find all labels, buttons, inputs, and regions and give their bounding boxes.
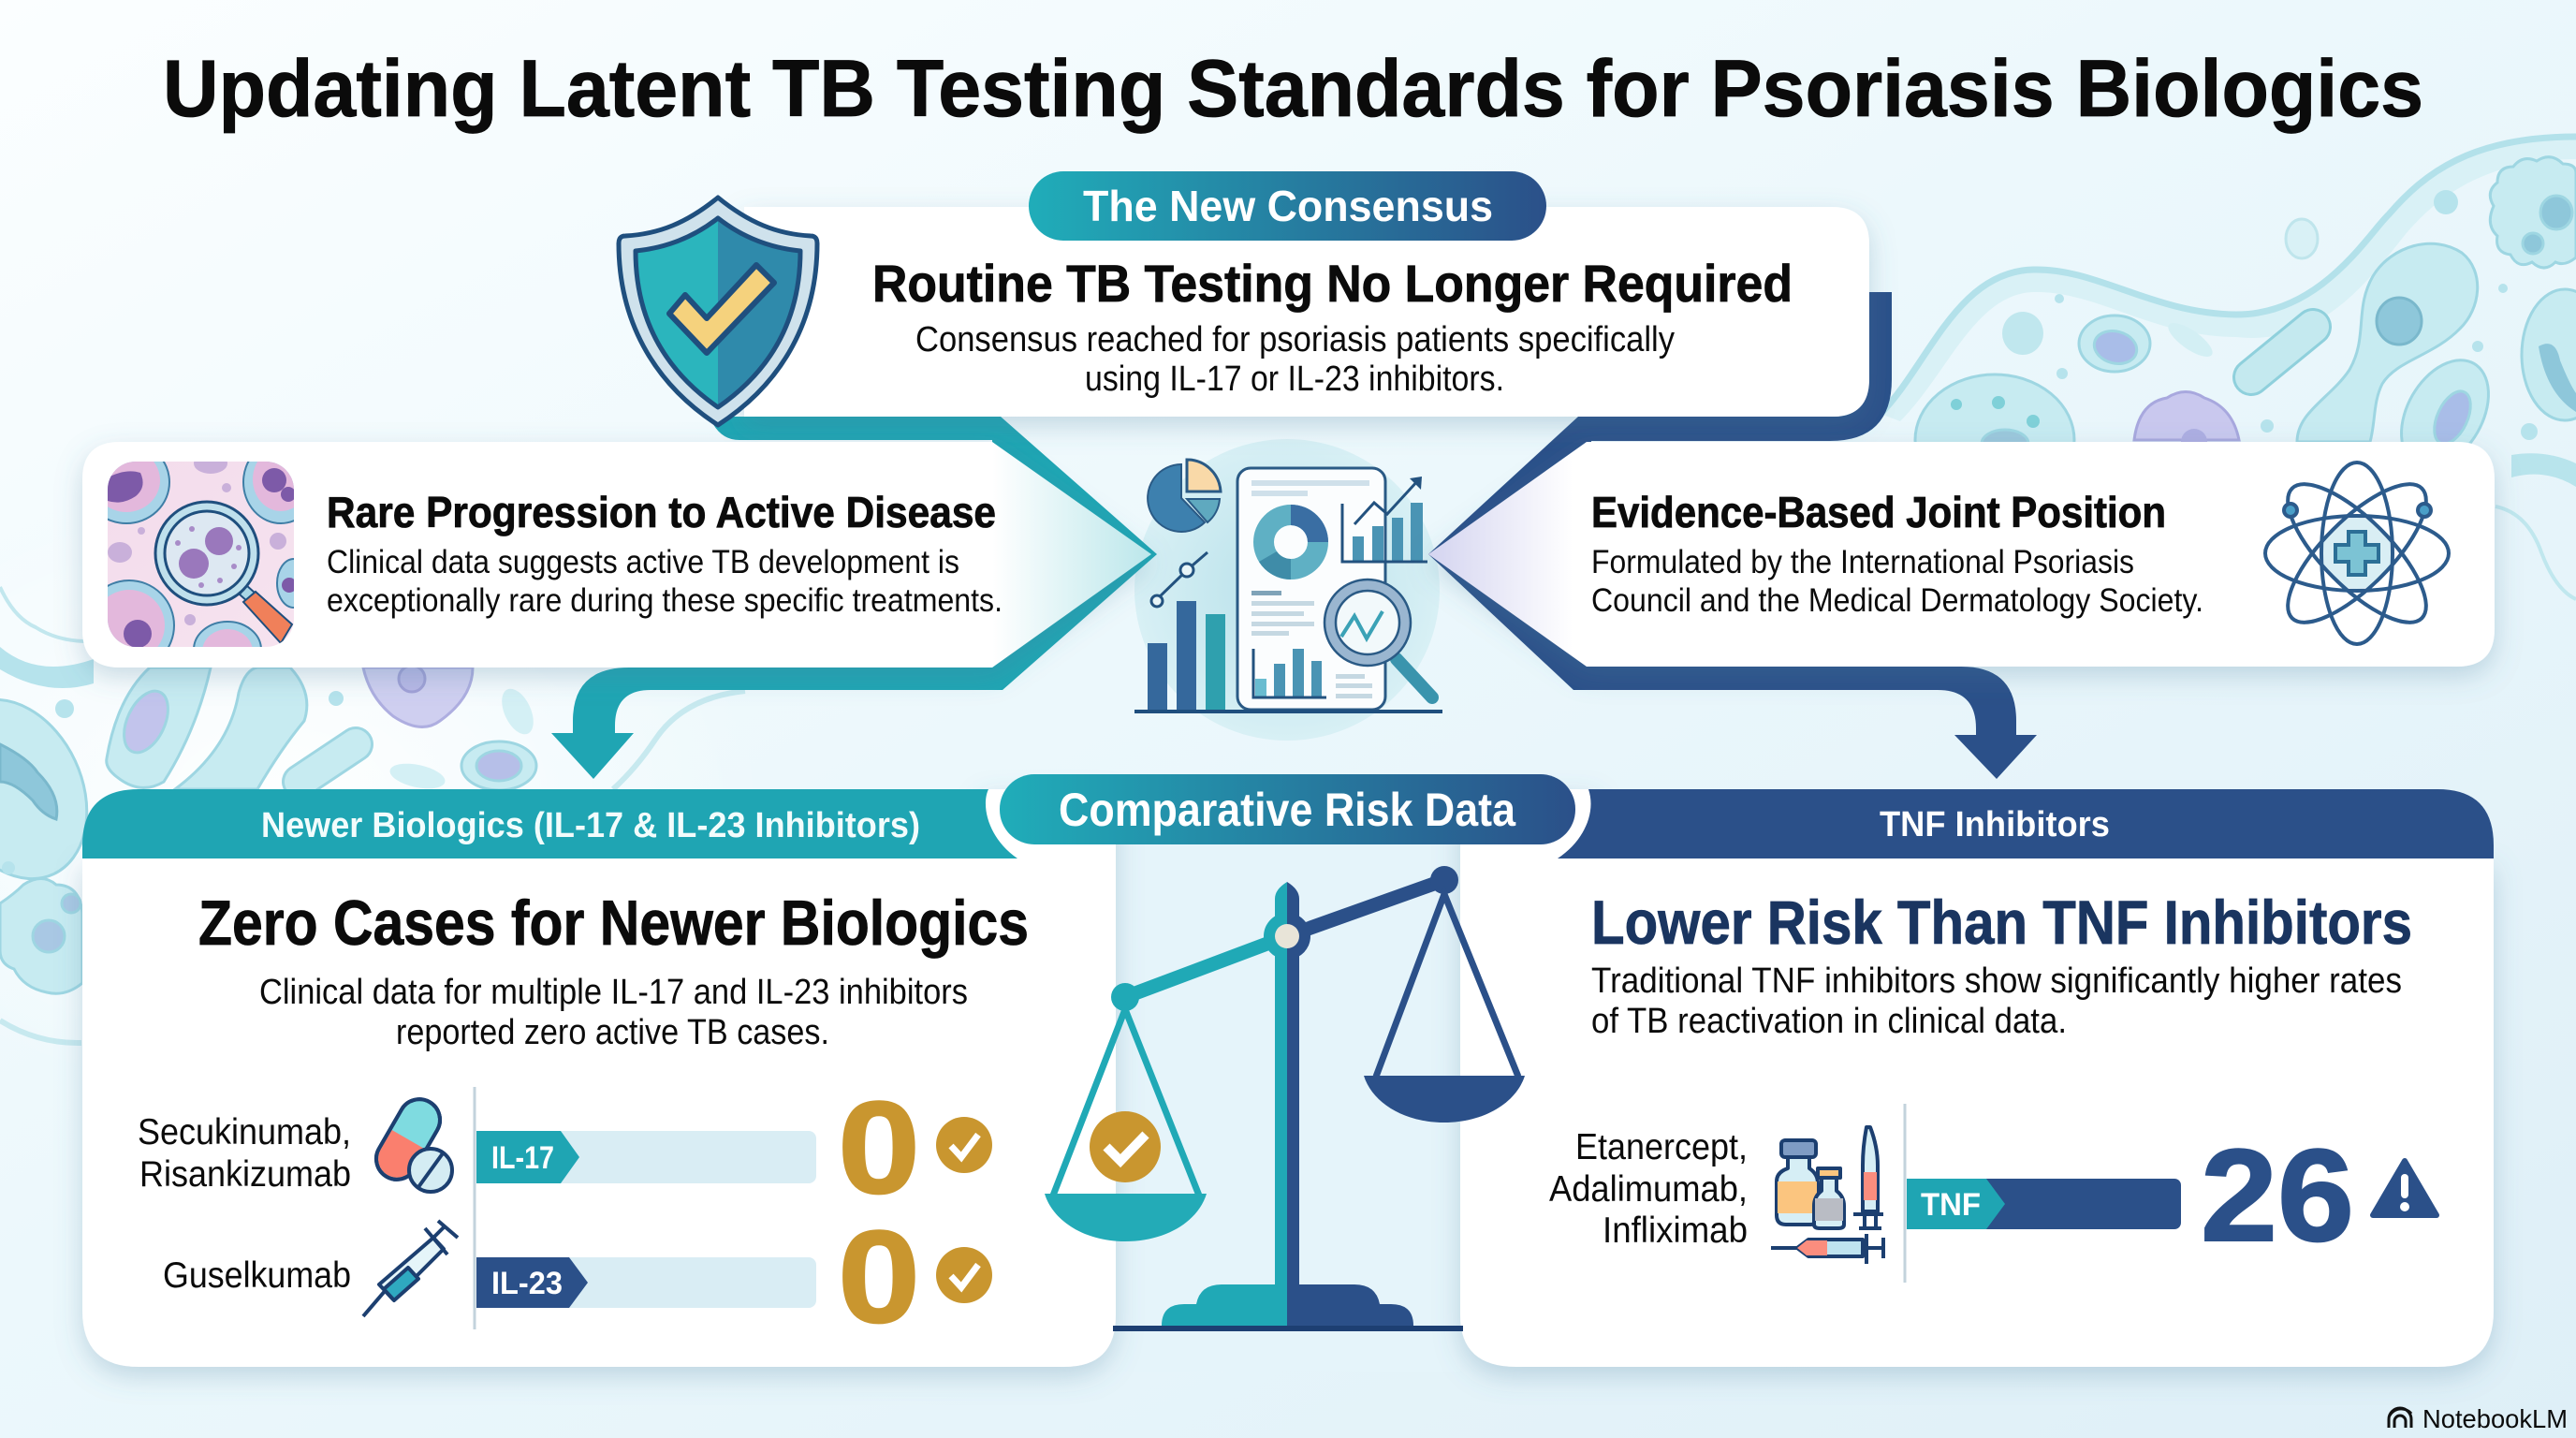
text: TNF drug names: Etanercept,	[1575, 1127, 1748, 1167]
bar: IL-17: IL-17	[491, 1140, 554, 1176]
badge: the new consensus	[1029, 171, 1546, 241]
title: Updating Latent TB Testing Standards for Psoriasis Biologics	[163, 44, 2423, 134]
text: TNF drug names: Infliximab	[1603, 1211, 1748, 1251]
text: TNF description	[1591, 961, 2402, 1041]
value: IL-23 zero cases: 0	[838, 1203, 920, 1350]
text: evidence description: Formulated by the International Psoriasis	[1591, 544, 2134, 580]
text: evidence description: Council and the Medical Dermatology Society.	[1591, 582, 2203, 619]
icon: syringe	[363, 1221, 458, 1316]
row: IL-17 drugs	[138, 1074, 992, 1221]
header: TNF inhibitors	[1558, 789, 2494, 858]
bar: TNF: TNF	[1921, 1187, 1981, 1223]
heading: rare progression: Rare Progression to Active Disease	[327, 488, 996, 536]
heading: zero cases: Zero Cases for Newer Biologics	[198, 888, 1029, 959]
text: zero cases description: reported zero active TB cases.	[396, 1013, 829, 1052]
value: IL-17 zero cases: 0	[838, 1074, 920, 1221]
panel: routine TB testing consensus	[744, 207, 1869, 417]
icon: atom with medical cross	[2265, 462, 2449, 644]
row: IL-23 drugs: Guselkumab	[163, 1255, 351, 1296]
text: consensus description: Consensus reached for psoriasis patients specifically	[915, 320, 1675, 360]
badge: the new consensus: The New Consensus	[1083, 182, 1493, 230]
row: IL-23 drugs	[163, 1203, 992, 1350]
text: TNF description: Traditional TNF inhibitors show significantly higher rates	[1591, 961, 2402, 1001]
text: evidence description	[1591, 544, 2203, 619]
row: IL-17 drugs: Secukinumab,	[138, 1112, 351, 1152]
text: TNF description: of TB reactivation in clinical data.	[1591, 1002, 2067, 1041]
text: consensus description: using IL-17 or IL-23 inhibitors.	[1085, 360, 1504, 399]
badge: comparative risk data	[1000, 774, 1575, 844]
header: TNF inhibitors: TNF Inhibitors	[1880, 805, 2110, 844]
text: TNF drug names	[1549, 1127, 1748, 1251]
bar: IL-23	[476, 1257, 816, 1308]
panel: TNF inhibitors	[1460, 789, 2494, 1367]
value: 26 TNF cases: 26	[2201, 1122, 2354, 1269]
icon: capsule and tablet	[369, 1092, 452, 1192]
decorative cells: left side	[0, 587, 745, 1043]
heading: evidence-based: Evidence-Based Joint Position	[1591, 488, 2166, 536]
icon: check IL-23	[936, 1247, 992, 1303]
panel: rare progression to active disease	[82, 441, 1151, 678]
panel: newer biologics	[82, 789, 1116, 1367]
central chart illustration	[1134, 439, 1442, 741]
header: newer biologics: Newer Biologics (IL-17 & IL-23 Inhibitors)	[261, 806, 920, 845]
icon: gold check on pan	[1090, 1111, 1161, 1182]
row: IL-17 drugs: Risankizumab	[139, 1154, 351, 1195]
chart: balance scale	[1045, 866, 1525, 1328]
heading: lower risk: Lower Risk Than TNF Inhibitors	[1591, 888, 2412, 957]
text: rare progression description: exceptionally rare during these specific treatments.	[327, 582, 1003, 619]
text: zero cases description	[259, 973, 968, 1052]
text: TNF drug names: Adalimumab,	[1549, 1169, 1748, 1210]
logo: NotebookLM: NotebookLM	[2422, 1404, 2568, 1433]
icon: check IL-17	[936, 1117, 992, 1173]
header: newer biologics	[82, 789, 1017, 858]
image: cells under magnifier	[108, 462, 294, 647]
bar: IL-17	[476, 1131, 816, 1183]
panel: evidence-based joint position	[1428, 442, 2495, 667]
text: rare progression description	[327, 544, 1003, 619]
navy connector with arrow	[1428, 292, 2037, 779]
badge: comparative risk data: Comparative Risk Data	[1059, 784, 1516, 836]
teal connector with arrow	[551, 417, 1157, 779]
icon: shield with check	[619, 198, 817, 425]
icon: vials and syringe	[1771, 1127, 1883, 1264]
text: rare progression description: Clinical data suggests active TB development is	[327, 544, 959, 580]
decorative cells: upper right	[1881, 137, 2576, 599]
icon: warning triangle	[2373, 1161, 2437, 1215]
text: zero cases description: Clinical data for multiple IL-17 and IL-23 inhibitors	[259, 973, 968, 1012]
text: consensus description	[915, 320, 1675, 399]
heading: routine testing: Routine TB Testing No Longer Required	[872, 254, 1793, 313]
panel: centre backdrop	[1116, 844, 1460, 1372]
bar: TNF	[1907, 1179, 2181, 1229]
bar: IL-23: IL-23	[491, 1266, 563, 1301]
